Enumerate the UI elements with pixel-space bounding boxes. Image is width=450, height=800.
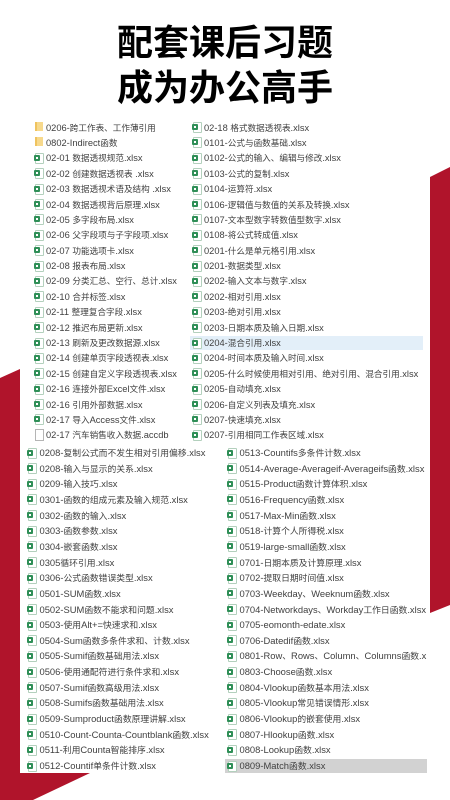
file row xyxy=(227,587,427,601)
file row xyxy=(27,446,236,460)
file row xyxy=(27,665,236,679)
file row: 0107-文本型数字转数值型数字.xlsx xyxy=(204,215,341,225)
file row xyxy=(27,712,236,726)
file row xyxy=(27,524,236,538)
file row: 0518-计算个人所得税.xlsx xyxy=(240,525,344,536)
file row: 0701-日期本质及计算原理.xlsx xyxy=(240,557,361,568)
file row: 0203-日期本质及输入日期.xlsx xyxy=(204,323,324,333)
file row: 0108-将公式转成值.xlsx xyxy=(204,230,298,240)
file row xyxy=(27,477,236,491)
file row xyxy=(27,587,236,601)
file row xyxy=(27,759,236,773)
file row: 0304-嵌套函数.xlsx xyxy=(40,541,117,552)
file row xyxy=(27,696,236,710)
file row: 02-07 功能选项卡.xlsx xyxy=(46,246,134,256)
file row: 0805-Vlookup常见错误情形.xlsx xyxy=(240,697,369,708)
file row: 02-12 推迟布局更新.xlsx xyxy=(46,323,143,333)
file row xyxy=(227,446,427,460)
file row: 0502-SUM函数不能求和问题.xlsx xyxy=(40,604,173,614)
file row: 0705-eomonth-edate.xlsx xyxy=(240,619,345,630)
file row xyxy=(227,509,427,523)
file row: 0516-Frequency函数.xlsx xyxy=(240,494,344,505)
file row xyxy=(27,681,236,695)
file row: 0201-什么是单元格引用.xlsx xyxy=(204,246,315,256)
file row xyxy=(192,413,434,427)
file row: 0503-使用Alt+=快速求和.xlsx xyxy=(40,619,157,630)
file row: 02-09 分类汇总、空行、总计.xlsx xyxy=(46,276,177,286)
file row: 0206-自定义列表及填充.xlsx xyxy=(204,400,315,410)
file row: 0808-Lookup函数.xlsx xyxy=(240,744,331,755)
file row: 02-03 数据透视术语及结构 .xlsx xyxy=(46,184,171,194)
file row: 0204-混合引用.xlsx xyxy=(204,338,281,348)
file row: 0501-SUM函数.xlsx xyxy=(40,588,121,599)
file row xyxy=(227,477,427,491)
file row: 02-14 创建单页字段透视表.xlsx xyxy=(46,353,168,363)
file row xyxy=(27,571,236,585)
title line 1: 配套课后习题 xyxy=(117,22,333,63)
file row xyxy=(192,428,434,442)
folder row: 0206-跨工作表、工作薄引用 xyxy=(46,122,156,132)
file row: 0101-公式与函数基础.xlsx xyxy=(204,138,307,148)
file row: 0515-Product函数计算体积.xlsx xyxy=(240,478,367,489)
row highlight: 0809 Match xyxy=(225,759,427,773)
file row xyxy=(27,509,236,523)
file row xyxy=(27,602,236,616)
database file row: 02-17 汽车销售收入数据.accdb xyxy=(46,430,169,440)
file row xyxy=(27,556,236,570)
file row xyxy=(27,649,236,663)
file row: 0706-Datedif函数.xlsx xyxy=(240,635,330,646)
file row: 02-08 报表布局.xlsx xyxy=(46,261,125,271)
file row: 0104-运算符.xlsx xyxy=(204,184,272,194)
file row xyxy=(227,571,427,585)
file row xyxy=(27,743,236,757)
file row: 02-13 刷新及更改数据源.xlsx xyxy=(46,338,160,348)
file row: 0704-Networkdays、Workday工作日函数.xlsx xyxy=(240,604,426,614)
file row: 02-16 引用外部数据.xlsx xyxy=(46,400,143,410)
file row xyxy=(227,556,427,570)
file row: 0514-Average-Averageif-Averageifs函数.xlsx xyxy=(240,463,424,474)
file row: 0202-相对引用.xlsx xyxy=(204,292,281,302)
file row: 0512-Countif单条件计数.xlsx xyxy=(40,760,156,771)
file row: 0207-引用相同工作表区域.xlsx xyxy=(204,430,324,440)
file row: 0509-Sumproduct函数原理讲解.xlsx xyxy=(40,713,186,724)
file row: 02-02 创建数据透视表 .xlsx xyxy=(46,169,154,179)
file row xyxy=(227,618,427,632)
file row xyxy=(27,728,236,742)
file row xyxy=(227,540,427,554)
file row: 0102-公式的输入、编辑与修改.xlsx xyxy=(204,153,341,163)
file row: 0303-函数参数.xlsx xyxy=(40,525,117,536)
file row xyxy=(227,743,427,757)
file row: 0201-数据类型.xlsx xyxy=(204,261,281,271)
file row xyxy=(27,618,236,632)
file row xyxy=(227,493,427,507)
file row: 0803-Choose函数.xlsx xyxy=(240,666,332,677)
file row: 0513-Countifs多条件计数.xlsx xyxy=(240,447,361,458)
file row: 0204-时间本质及输入时间.xlsx xyxy=(204,353,324,363)
file row xyxy=(227,665,427,679)
title line 2: 成为办公高手 xyxy=(117,67,333,108)
file row: 02-17 导入Access文件.xlsx xyxy=(46,415,155,425)
file row: 0519-large-small函数.xlsx xyxy=(240,541,346,552)
file row: 0305循环引用.xlsx xyxy=(40,557,114,568)
file row: 02-01 数据透视规范.xlsx xyxy=(46,153,143,163)
file row: 02-06 父字段项与子字段项.xlsx xyxy=(46,230,168,240)
file row: 02-15 创建自定义字段透视表.xlsx xyxy=(46,369,177,379)
file row: 0504-Sum函数多条件求和、计数.xlsx xyxy=(40,635,190,646)
file row xyxy=(227,681,427,695)
file row xyxy=(227,524,427,538)
file row: 0106-逻辑值与数值的关系及转换.xlsx xyxy=(204,200,350,210)
file row xyxy=(227,759,427,773)
file row: 0806-Vlookup的嵌套使用.xlsx xyxy=(240,713,360,724)
file row xyxy=(227,728,427,742)
file row xyxy=(27,493,236,507)
file row: 0209-输入技巧.xlsx xyxy=(40,478,117,489)
file row: 0804-Vlookup函数基本用法.xlsx xyxy=(240,682,369,693)
file row: 0703-Weekday、Weeknum函数.xlsx xyxy=(240,588,390,599)
file row: 02-10 合并标签.xlsx xyxy=(46,292,125,302)
file row: 0208-复制公式而不发生相对引用偏移.xlsx xyxy=(40,447,205,458)
folder row: 0802-Indirect函数 xyxy=(46,138,117,148)
file row: 0306-公式函数错误类型.xlsx xyxy=(40,572,153,583)
file row: 02-16 连接外部Excel文件.xlsx xyxy=(46,384,165,394)
file row: 0807-Hlookup函数.xlsx xyxy=(240,729,334,740)
file row: 02-04 数据透视背后原理.xlsx xyxy=(46,200,160,210)
file row: 0301-函数的组成元素及输入规范.xlsx xyxy=(40,494,188,505)
file row: 02-05 多字段布局.xlsx xyxy=(46,215,134,225)
file row: 0207-快速填充.xlsx xyxy=(204,415,281,425)
file row: 0202-输入文本与数字.xlsx xyxy=(204,276,307,286)
file row xyxy=(227,634,427,648)
file row xyxy=(227,712,427,726)
file row xyxy=(27,634,236,648)
file row: 0205-自动填充.xlsx xyxy=(204,384,281,394)
file row: 0508-Sumifs函数基础用法.xlsx xyxy=(40,697,164,708)
row highlight: 0204 mixed reference xyxy=(190,336,423,350)
file row: 0205-什么时候使用相对引用、绝对引用、混合引用.xlsx xyxy=(204,369,418,379)
file row: 0203-绝对引用.xlsx xyxy=(204,307,281,317)
file row: 0302-函数的输入.xlsx xyxy=(40,510,126,521)
file row: 0507-Sumif函数高级用法.xlsx xyxy=(40,682,159,693)
file row: 02-11 整理复合字段.xlsx xyxy=(46,307,142,317)
file row: 0506-使用通配符进行条件求和.xlsx xyxy=(40,666,179,677)
file row xyxy=(27,462,236,476)
file row: 0511-利用Counta智能排序.xlsx xyxy=(40,744,165,755)
file row: 02-18 格式数据透视表.xlsx xyxy=(204,122,309,132)
white panel: file list xyxy=(20,115,430,773)
file row: 0510-Count-Counta-Countblank函数.xlsx xyxy=(40,729,209,740)
file row: 0517-Max-Min函数.xlsx xyxy=(240,510,336,521)
file row xyxy=(27,540,236,554)
file row xyxy=(227,696,427,710)
file row: 0103-公式的复制.xlsx xyxy=(204,169,289,179)
file row: 0809-Match函数.xlsx xyxy=(240,760,325,771)
file row: 0505-Sumif函数基础用法.xlsx xyxy=(40,650,159,661)
file row: 0702-提取日期时间值.xlsx xyxy=(240,572,344,583)
file row: 0208-输入与显示的关系.xlsx xyxy=(40,463,153,474)
